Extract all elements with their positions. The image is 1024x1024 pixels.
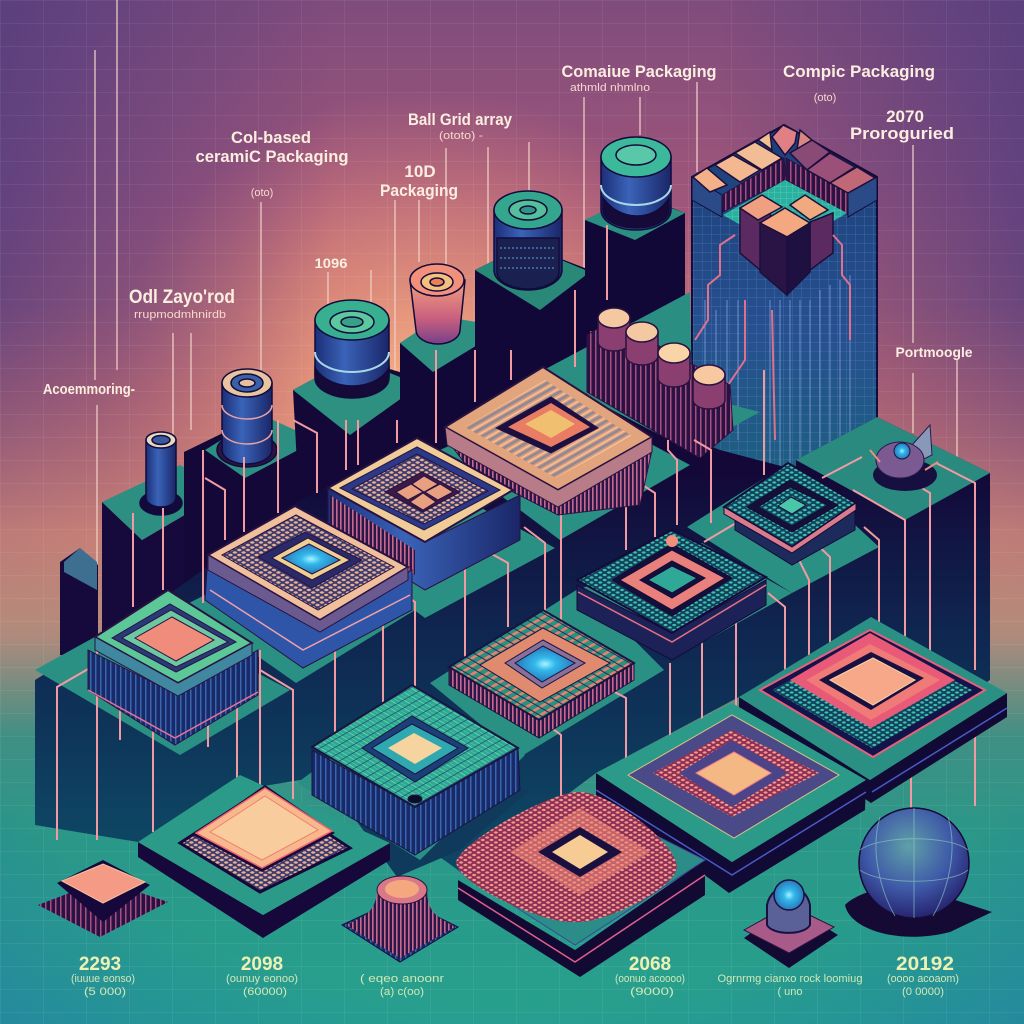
label: Packaging: Packaging xyxy=(380,181,458,200)
sublabel: (oto) xyxy=(251,187,273,199)
label: Odl Zayo'rod: Odl Zayo'rod xyxy=(129,287,235,308)
tower side panels xyxy=(692,177,877,217)
cylinder: 6 xyxy=(601,137,671,230)
central dark block mass xyxy=(35,400,990,870)
labels: bottom timeline xyxy=(71,954,959,998)
chip C: cyan core xyxy=(205,506,412,668)
tower rim tiles xyxy=(693,125,875,193)
chip H: green circuit block xyxy=(312,685,520,855)
label: ceramic packaging: ceramiC Packaging xyxy=(196,147,348,166)
floor behind pins xyxy=(540,292,760,450)
device Q: small sensor on plateau xyxy=(870,425,938,491)
dome device P xyxy=(744,880,838,968)
year: 2293: 2293 xyxy=(79,954,121,975)
sphere O with shadow xyxy=(845,808,992,937)
label: 1096: 1096 xyxy=(314,255,348,271)
year: 20192: 20192 xyxy=(896,954,954,975)
caption: (ounuy eonoo) xyxy=(226,973,298,985)
caption: (9000) xyxy=(630,986,674,998)
plate L with dome chip xyxy=(456,792,705,977)
sublabel: rrupmodmhnirdb xyxy=(134,309,226,321)
labels: upper xyxy=(43,62,973,398)
tower inner walls xyxy=(722,158,848,214)
label: Col-based: Col-based xyxy=(231,128,311,147)
caption: ( uno xyxy=(777,986,803,998)
plate I with leaded chip xyxy=(138,775,390,938)
tower center cubes xyxy=(740,195,833,295)
caption: (60000) xyxy=(243,986,287,998)
cylinder: 2 xyxy=(217,369,277,467)
pin column cluster xyxy=(587,308,733,458)
year: 2068: 2068 xyxy=(629,954,671,975)
teal plates, rear tier xyxy=(35,395,879,860)
plate N with pink chip xyxy=(739,617,1007,803)
cylinder: pink cup xyxy=(410,264,465,344)
chip A: ball grid on tan xyxy=(445,367,652,515)
caption: (oonuo acoooo) xyxy=(615,973,685,985)
tower: compute packaging xyxy=(692,125,877,470)
chip G: blue core with orange traces xyxy=(449,610,634,738)
label leader lines in the sky xyxy=(95,0,957,575)
cylinder: 5 xyxy=(494,191,562,290)
label: Acoemmoring: Acoemmoring- xyxy=(43,381,135,398)
chip D: green lid with blue body xyxy=(88,590,258,745)
label: Ball Grid array: Ball Grid array xyxy=(408,110,512,129)
caption: ( eqeo anoonr xyxy=(360,973,444,985)
right plateau block xyxy=(796,417,990,740)
chip F: teal dotted with salmon ring xyxy=(577,530,766,660)
plate M with concentric chip xyxy=(596,703,866,893)
caption: (iuuue eonso) xyxy=(71,973,135,985)
caption: (0 0000) xyxy=(902,986,944,998)
label: Comaiue Packaging: Comaiue Packaging xyxy=(562,62,716,81)
staircase blocks xyxy=(60,195,685,660)
tower inner recess xyxy=(723,180,847,250)
tower traces xyxy=(695,235,850,440)
caption: (oooo acoaom) xyxy=(887,973,959,985)
sublabel: athmld nhmlno xyxy=(570,82,650,94)
chip J: small leaded chip xyxy=(38,860,168,937)
caption: (5 000) xyxy=(84,986,126,998)
sublabel: (ototo) - xyxy=(439,130,483,142)
connecting traces xyxy=(57,225,975,840)
year: 2098: 2098 xyxy=(241,954,283,975)
cylinder: 3 xyxy=(315,300,389,398)
caption: (a) c(oo) xyxy=(380,986,424,998)
bell chip K xyxy=(342,876,458,962)
label: 10D: 10D xyxy=(404,162,436,181)
caption: Ogrnrmg cianxo rock loomiug xyxy=(718,973,862,985)
shadow under circuit block xyxy=(345,790,530,877)
label: Proroguried: Proroguried xyxy=(850,124,954,143)
label: 2070: 2070 xyxy=(886,107,924,126)
label: Compic Packaging: Compic Packaging xyxy=(783,62,935,81)
sublabel: (oto) xyxy=(814,92,836,104)
label: Portmoogle: Portmoogle xyxy=(896,344,973,360)
chip E: teal core xyxy=(724,463,856,565)
cylinder: 1 xyxy=(140,432,182,515)
chip B: quad core xyxy=(328,438,520,590)
